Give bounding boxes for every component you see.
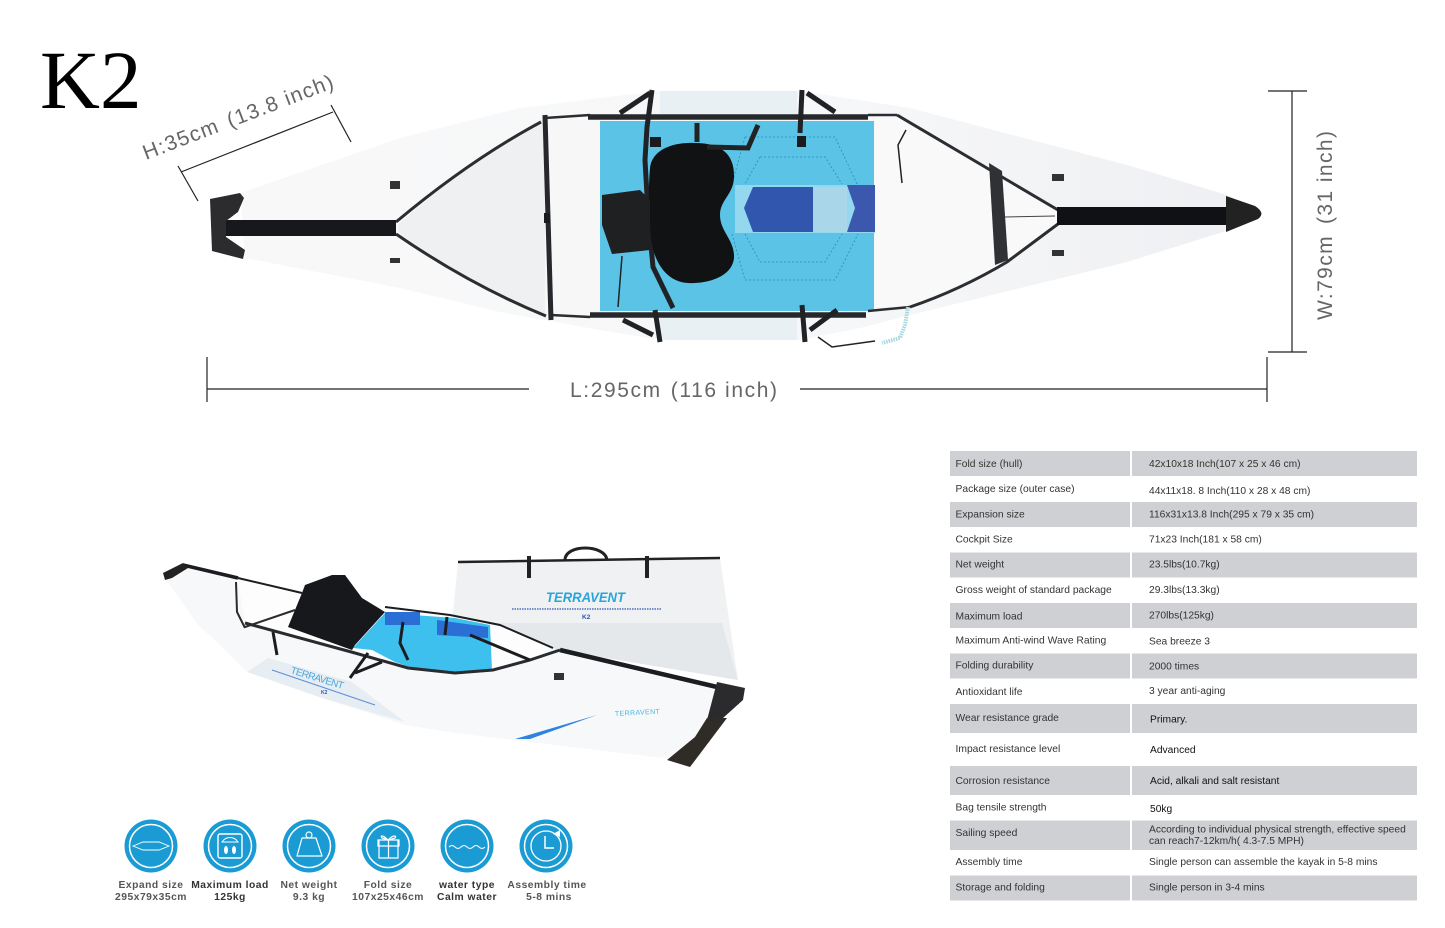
row labels: Antioxidant life [956,687,1023,698]
row labels: Net weight [956,560,1004,570]
row values: According to individual physical strength, effective speed [1149,824,1406,836]
bow frame [236,582,295,628]
warning label [744,187,813,232]
row labels: Storage and folding [956,882,1045,894]
seat bag [602,190,650,254]
icon: assembly time [507,820,587,903]
icon: maximum load: Maximum load [191,880,269,891]
row labels: Package size (outer case) [956,484,1075,495]
row values: Acid, alkali and salt resistant [1150,776,1279,787]
row values: 50kg [1150,804,1173,815]
seat back handle [697,123,758,148]
icon: water type [437,820,497,903]
row values: Advanced [1150,745,1196,756]
folded case: TERRAVENT [546,589,626,605]
kayak top view [210,90,1263,347]
row labels: Maximum Anti-wind Wave Rating [956,636,1106,646]
cockpit straps [273,617,530,678]
row values: Primary. [1150,714,1187,726]
inner cockpit [238,580,550,670]
icon: water type: water type [438,880,495,891]
hull logos: TERRAVENT [289,665,345,692]
icon: net weight [280,820,338,903]
leash coil [882,307,908,343]
icon: assembly time: Assembly time [507,880,587,891]
straps [620,90,837,342]
deck clip [554,673,564,680]
seat [649,143,734,283]
icon: water type: Calm water [437,892,497,903]
row labels: Sailing speed [956,828,1018,839]
stern flap [667,718,727,767]
row labels: Maximum load [956,612,1023,622]
icon: expand size: 295x79x35cm [115,892,187,903]
row labels: Fold size (hull) [956,459,1022,470]
seat back [288,575,385,650]
frame lines [396,115,1058,316]
row labels: Corrosion resistance [956,776,1050,787]
leash cord [818,337,875,347]
icon: maximum load [191,820,269,903]
rear cap [210,193,245,259]
shaded row backgrounds [950,451,1417,900]
row values: 44x11x18. 8 Inch(110 x 28 x 48 cm) [1149,486,1310,497]
row values: 270lbs(125kg) [1149,610,1214,622]
row labels: Cockpit Size [956,534,1013,546]
row labels: Bag tensile strength [956,802,1047,814]
dimension: height: H:35cm(13.8 inch) [140,70,338,165]
row values: 2000 times [1149,662,1199,672]
row labels: Impact resistance level [956,744,1060,755]
row labels: Folding durability [956,660,1034,672]
gunwale lines [183,565,238,578]
bow cap [1226,196,1261,232]
kayak perspective photo: TERRAVENT [615,709,661,718]
row values: Sea breeze 3 [1149,636,1210,648]
blue floor [353,613,492,672]
cockpit fabric left [398,118,545,318]
row values: Single person in 3-4 mins [1149,882,1265,894]
cockpit fabric right [875,113,1057,307]
hull side panel [247,658,405,722]
icon row [115,820,587,903]
icon: assembly time: 5-8 mins [526,892,572,903]
hull blue stripe [515,715,597,739]
cockpit floor [600,121,874,311]
dimension: height [140,70,351,201]
rear stem [225,220,396,236]
kayak perspective photo [163,548,745,767]
nose cap [163,563,188,580]
folded case: K2 [582,614,591,621]
icon: maximum load: 125kg [214,892,246,903]
row labels: Gross weight of standard package [956,585,1112,596]
row values: can reach7-12km/h( 4.3-7.5 MPH) [1149,836,1304,847]
dimension: width: W:79cm(31 inch) [1314,130,1337,320]
row labels: Assembly time [956,857,1023,868]
spec table [950,451,1417,900]
dimension: length: L:295cm (116 inch) [570,379,779,402]
icon: fold size [352,820,424,903]
row values: 116x31x13.8 Inch(295 x 79 x 35 cm) [1149,510,1314,520]
row values: 42x10x18 Inch(107 x 25 x 46 cm) [1149,459,1301,470]
folded case [452,548,738,680]
row values [1149,459,1406,894]
icon: expand size [115,820,187,903]
stern cap [707,682,745,720]
title: K2 [40,34,141,126]
row values: 3 year anti-aging [1149,686,1226,697]
kayak perspective photo: K2 [321,690,328,696]
row values: 29.3lbs(13.3kg) [1149,585,1220,596]
row labels [956,459,1112,894]
deck clips [390,174,1064,263]
hull body [165,565,717,760]
floor dashed outlines [732,137,858,280]
icon: net weight: Net weight [280,880,338,891]
bow stem [1057,207,1233,225]
icon: fold size: Fold size [364,880,412,891]
bow rope [898,130,906,183]
row values: 71x23 Inch(181 x 58 cm) [1149,534,1262,546]
floor centre band [735,185,875,233]
row values: 23.5lbs(10.7kg) [1149,560,1220,570]
icon: net weight: 9.3 kg [293,892,325,903]
row labels: Expansion size [956,510,1025,520]
gunwale bars [588,117,868,315]
icon: fold size: 107x25x46cm [352,892,424,903]
buckles [544,136,806,223]
side gunwale panels [660,91,797,340]
icon: expand size: Expand size [118,880,184,891]
dimension: width [1268,91,1337,352]
blue patches [385,612,488,638]
hull [240,91,1263,340]
bag strap [618,256,622,307]
dimension: length [207,357,1267,402]
row values: Single person can assemble the kayak in 5-8 mins [1149,857,1377,868]
row labels: Wear resistance grade [956,713,1059,724]
